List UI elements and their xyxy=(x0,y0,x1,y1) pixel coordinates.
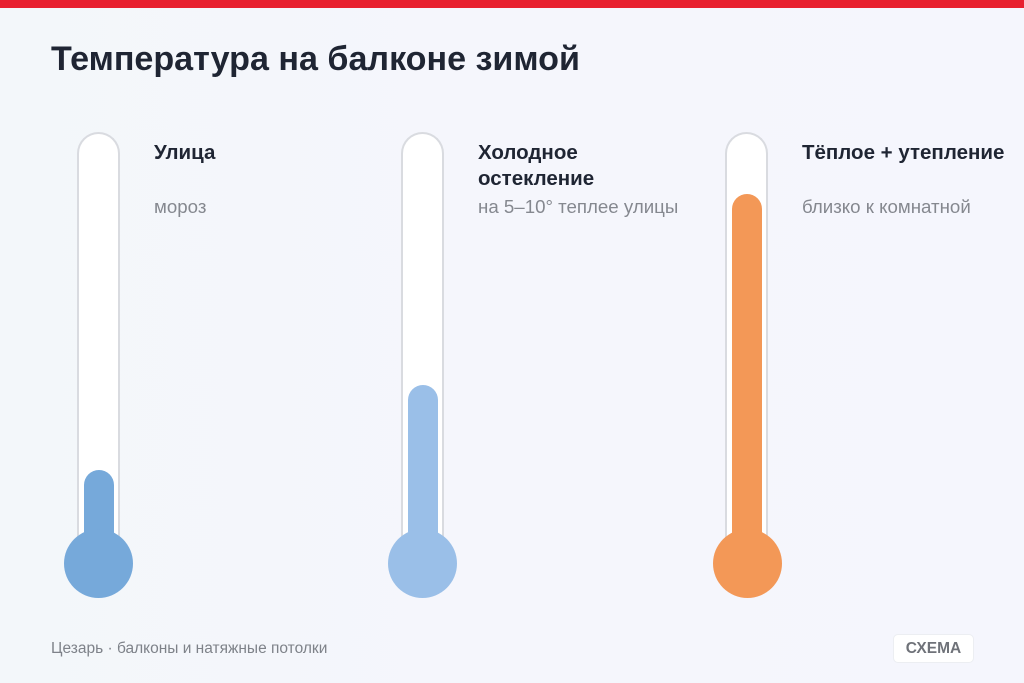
top accent bar xyxy=(0,0,1024,8)
description: cold glazing: на 5–10° теплее улицы xyxy=(478,196,678,217)
label: street: Улица xyxy=(154,141,215,164)
footer source text: Цезарь · балконы и натяжные потолки xyxy=(51,640,327,657)
label: warm plus insulation: Тёплое + утепление xyxy=(802,141,1004,164)
description: warm plus insulation: близко к комнатной xyxy=(802,196,971,217)
thermometer tube xyxy=(725,132,768,552)
label: cold glazing xyxy=(478,141,594,190)
title: Температура на балконе зимой xyxy=(51,40,580,78)
panel: street thermometer xyxy=(64,132,216,598)
thermometer bulb xyxy=(712,529,782,598)
badge: scheme xyxy=(893,634,974,663)
thermometer tube xyxy=(401,132,444,552)
panel: warm glazing with insulation thermometer xyxy=(713,132,1004,598)
label: cold glazing: остекление xyxy=(478,167,594,190)
panel: cold glazing thermometer xyxy=(388,132,678,598)
thermometer fill level xyxy=(408,385,438,560)
description: street: мороз xyxy=(154,196,206,217)
badge: scheme: СХЕМА xyxy=(906,640,961,657)
thermometer fill level xyxy=(732,194,762,560)
thermometer fill level xyxy=(84,470,114,560)
thermometer bulb xyxy=(388,529,457,598)
label: cold glazing: Холодное xyxy=(478,141,578,164)
thermometer bulb xyxy=(64,529,133,598)
thermometer tube xyxy=(77,132,120,552)
